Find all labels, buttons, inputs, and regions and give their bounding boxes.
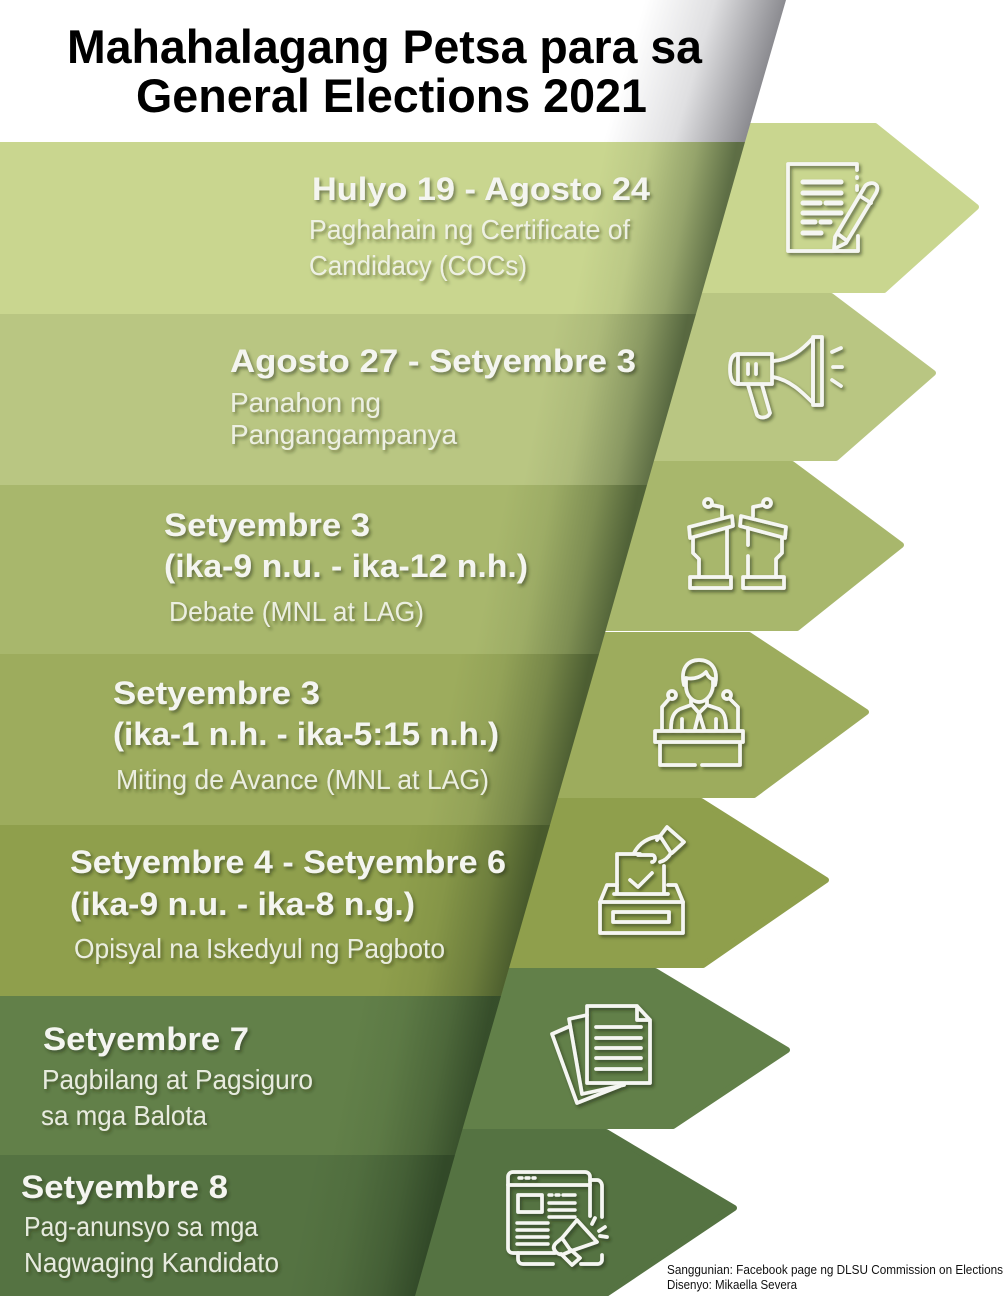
text block: miting de avance: Miting de Avance (MNL at LAG)	[116, 764, 489, 795]
text block: miting de avance: (ika-1 n.h. - ika-5:15 n.h.)	[113, 716, 499, 752]
arrow tab 4	[500, 635, 866, 795]
source and credits: Disenyo: Mikaella Severa	[667, 1278, 797, 1292]
text block: proclamation: Nagwaging Kandidato	[24, 1247, 279, 1278]
icon: ballot box	[600, 827, 684, 933]
icon: document and pencil	[788, 164, 877, 251]
text block: campaign period: Pangangampanya	[230, 419, 457, 450]
text block: counting: Pagbilang at Pagsiguro	[42, 1064, 313, 1095]
text block: counting	[41, 1021, 313, 1131]
fold shading along diagonal	[0, 142, 745, 1296]
text block: voting schedule: Opisyal na Iskedyul ng Pagboto	[74, 933, 445, 964]
text block: proclamation: Pag-anunsyo sa mga	[24, 1211, 258, 1242]
text block: counting: Setyembre 7	[43, 1021, 249, 1057]
arrow tab 5	[450, 801, 826, 965]
text block: debate: (ika-9 n.u. - ika-12 n.h.)	[164, 548, 528, 584]
text block: filing of COCs: Paghahain ng Certificate of	[309, 214, 630, 245]
text block: proclamation	[21, 1169, 279, 1278]
icon: megaphone	[730, 337, 842, 417]
icon: news page with megaphone	[508, 1172, 607, 1265]
text block: debate	[164, 507, 528, 627]
title	[67, 20, 703, 122]
arrow tab 1	[650, 126, 976, 290]
icon: speaker at lectern	[655, 660, 743, 765]
title: Mahahalagang Petsa para sa	[67, 20, 703, 73]
text block: campaign period: Agosto 27 - Setyembre 3	[230, 343, 636, 379]
text block: debate: Debate (MNL at LAG)	[169, 596, 424, 627]
stepped green bands	[0, 142, 745, 1296]
arrow tab 6	[400, 971, 787, 1126]
text block: campaign period	[230, 343, 636, 450]
text block: campaign period: Panahon ng	[230, 387, 381, 418]
text block: voting schedule: Setyembre 4 - Setyembre 6	[70, 844, 506, 880]
text block: filing of COCs: Hulyo 19 - Agosto 24	[312, 171, 650, 207]
text block: filing of COCs: Candidacy (COCs)	[309, 250, 527, 281]
title background with gray fold	[0, 0, 786, 142]
text block: proclamation: Setyembre 8	[21, 1169, 228, 1205]
text block: miting de avance	[113, 675, 499, 795]
text block: counting: sa mga Balota	[41, 1100, 207, 1131]
text block: miting de avance: Setyembre 3	[113, 675, 320, 711]
text block: voting schedule: (ika-9 n.u. - ika-8 n.g.)	[70, 886, 415, 922]
text block: voting schedule	[70, 844, 506, 964]
icon: two debate podiums	[689, 499, 786, 588]
text block: debate: Setyembre 3	[164, 507, 370, 543]
text block: filing of COCs	[309, 171, 650, 281]
arrow tab 3	[560, 464, 901, 628]
arrow tab 7	[380, 1132, 734, 1296]
source and credits	[667, 1263, 1003, 1292]
arrow tab 2	[600, 296, 933, 458]
title: General Elections 2021	[136, 69, 647, 122]
arrow tabs	[380, 126, 976, 1296]
icon: stacked papers	[552, 1006, 650, 1103]
